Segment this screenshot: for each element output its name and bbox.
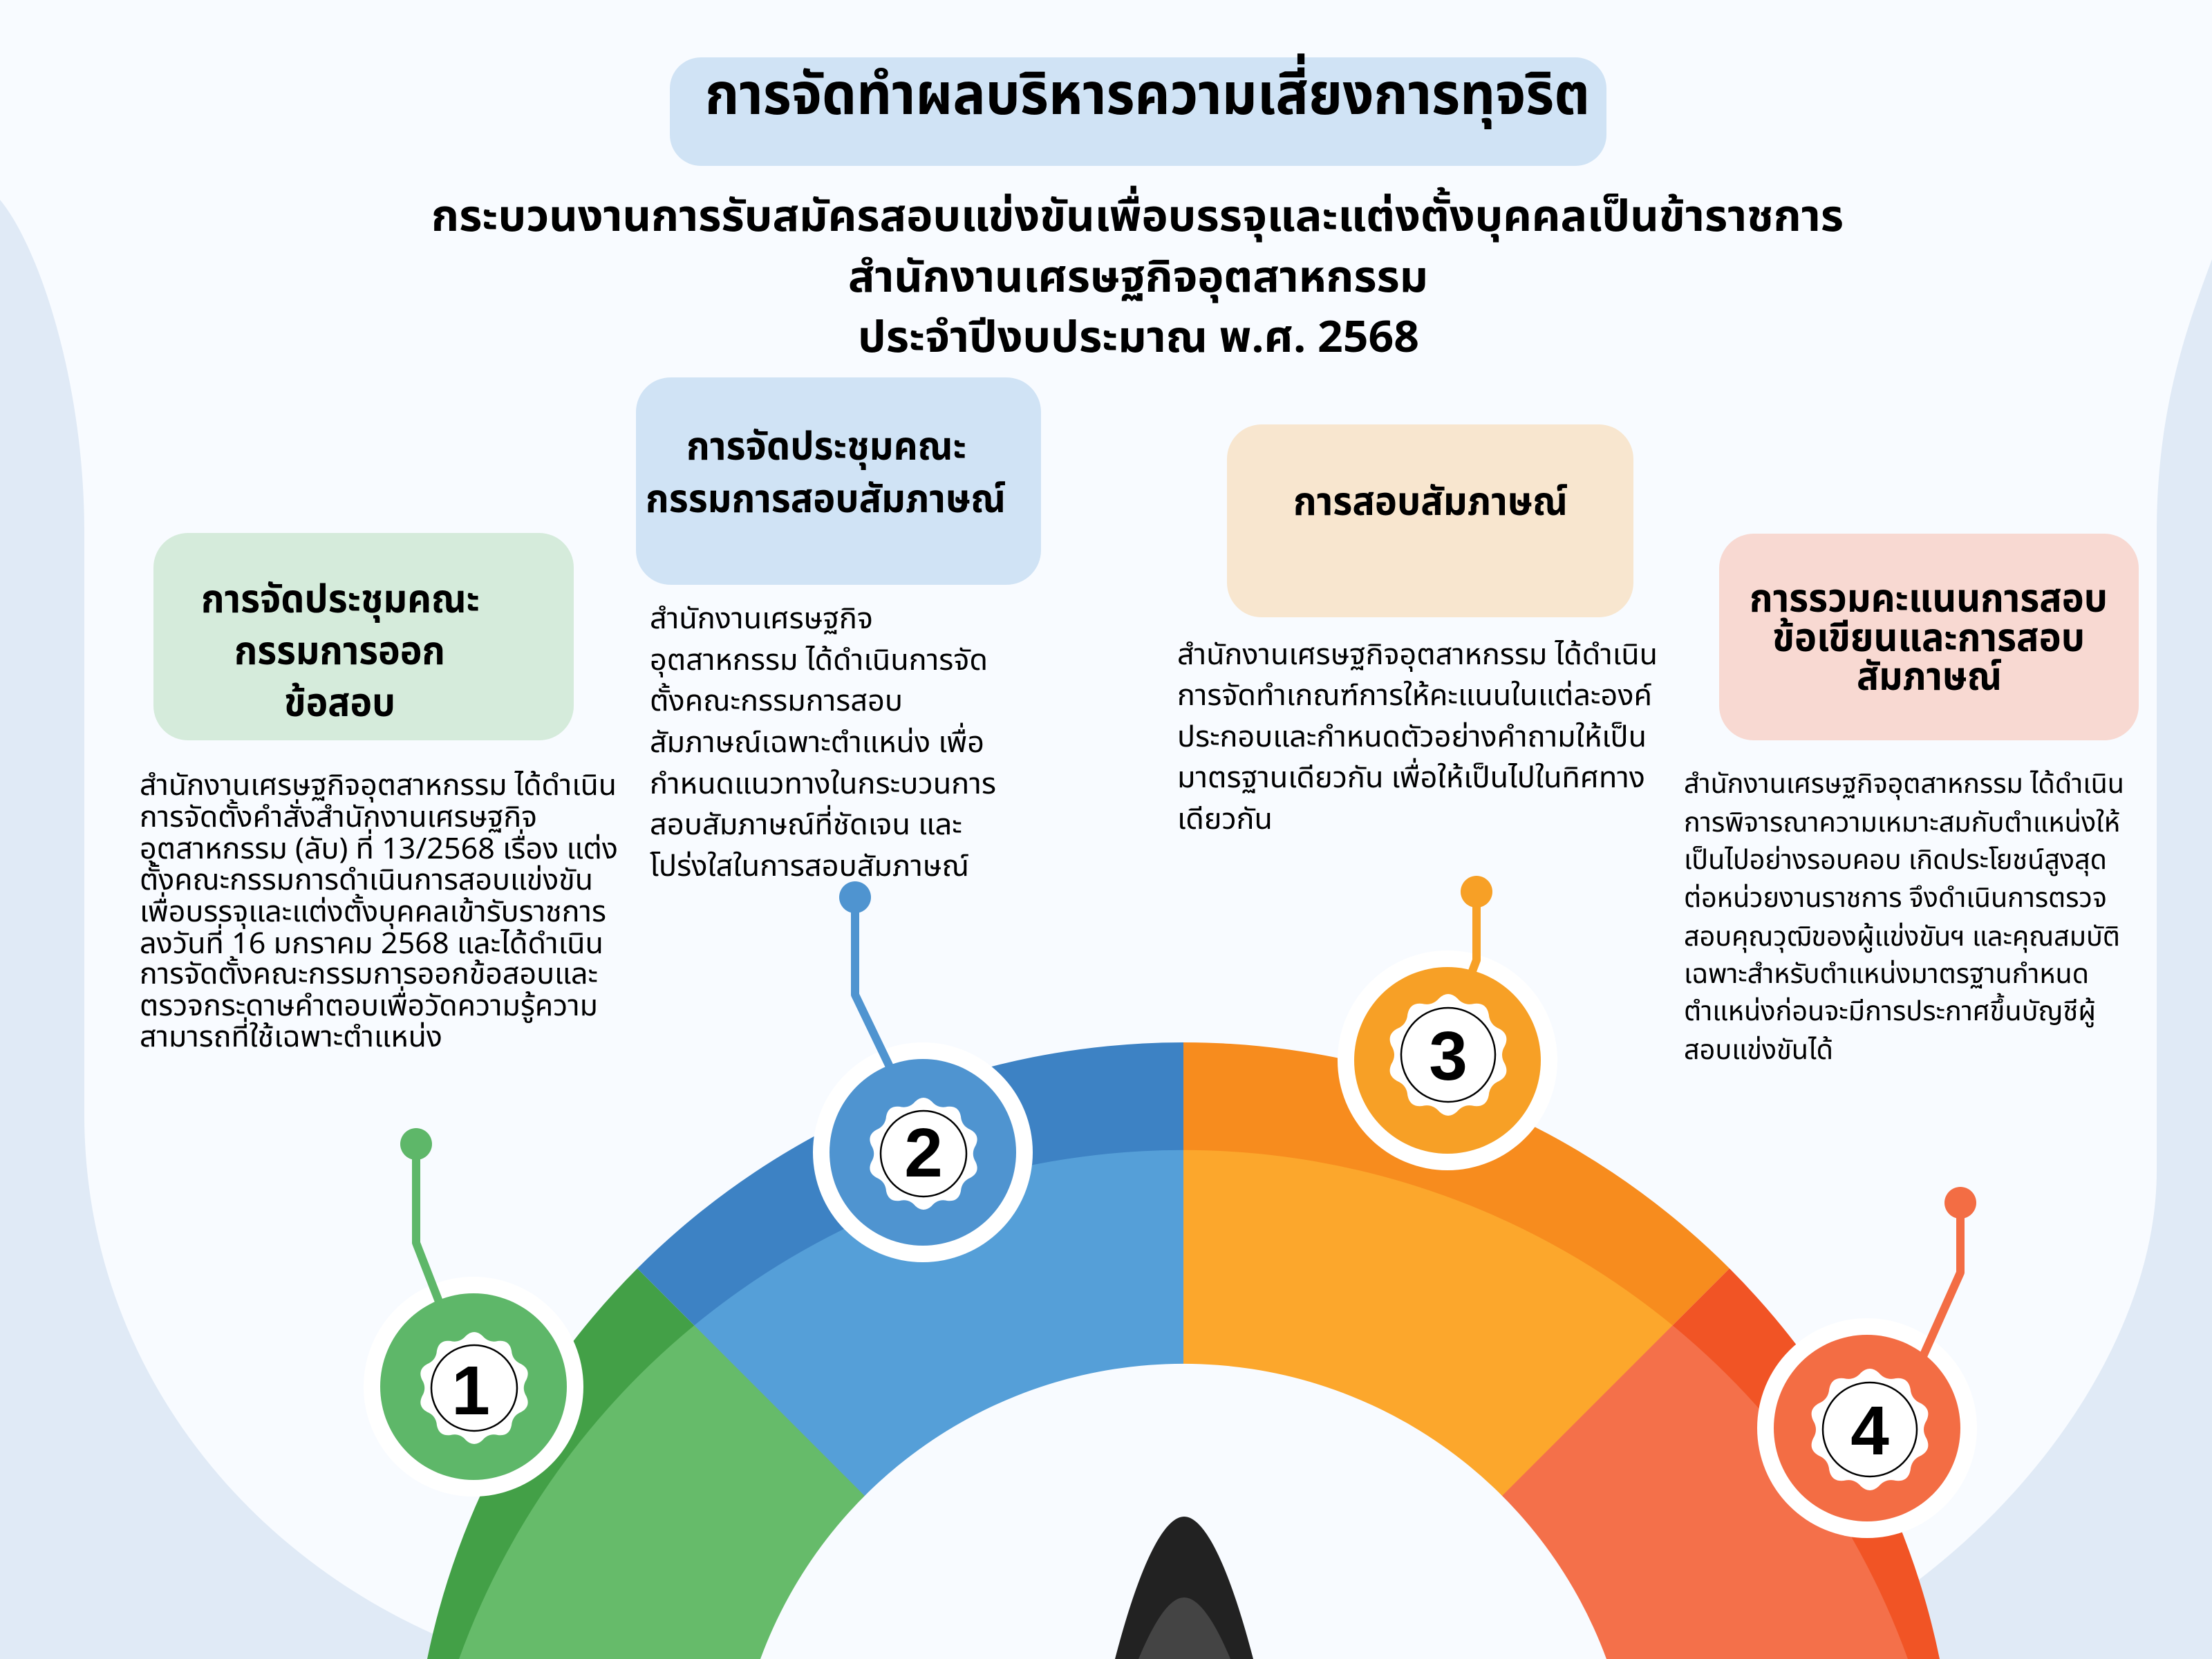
text block: step 1 description [140, 764, 618, 1060]
text block: step 2 description: กำหนดแนวทางในกระบวนการ [650, 762, 996, 807]
panel: step 1 heading [153, 533, 574, 740]
background: left side shape [0, 200, 484, 1659]
title: การจัดทำผลบริหารความเสี่ยงการทุจริต [705, 53, 1590, 140]
text block: step 3 description: มาตรฐานเดียวกัน เพื่อให้เป็นไปในทิศทาง [1177, 756, 1645, 800]
text block: step 1 description: ตรวจกระดาษคำตอบเพื่อวัดความรู้ความ [140, 984, 598, 1029]
text block: step 4 description [1684, 765, 2124, 1071]
text block: step 2 description: อุตสาหกรรม ได้ดำเนินการจัด [650, 639, 988, 683]
badge: step 3 [1338, 876, 1557, 1170]
badge: step 1 [364, 1128, 583, 1497]
subtitle: สำนักงานเศรษฐกิจอุตสาหกรรม [848, 246, 1428, 312]
icon: gauge needle [1115, 1517, 1253, 1659]
text block: step 4 description: สอบแข่งขันได้ [1684, 1031, 1833, 1071]
text block: step 1 description: การจัดตั้งคณะกรรมการออกข้อสอบและ [140, 953, 598, 997]
text block: step 4 description: สำนักงานเศรษฐกิจอุตสาหกรรม ได้ดำเนิน [1684, 765, 2124, 805]
text block: step 1 description: สำนักงานเศรษฐกิจอุตสาหกรรม ได้ดำเนิน [140, 764, 617, 808]
text block: step 2 description: ตั้งคณะกรรมการสอบ [650, 679, 903, 724]
panel: step 1 heading: การจัดประชุมคณะ [201, 571, 480, 630]
badge: step 4: 4 [1850, 1392, 1889, 1470]
subtitle [431, 185, 1844, 372]
badge: step 3: 3 [1429, 1018, 1468, 1095]
text block: step 4 description: เป็นไปอย่างรอบคอบ เกิดประโยชน์สูงสุด [1684, 841, 2107, 881]
panel: step 2 heading [636, 377, 1041, 585]
text block: step 3 description: การจัดทำเกณฑ์การให้คะแนนในแต่ละองค์ [1177, 674, 1652, 718]
text block: step 3 description: สำนักงานเศรษฐกิจอุตสาหกรรม ได้ดำเนิน [1177, 633, 1658, 677]
text block: step 4 description: ตำแหน่งก่อนจะมีการประกาศขึ้นบัญชีผู้ [1684, 992, 2096, 1033]
text block: step 2 description: สอบสัมภาษณ์ที่ชัดเจน และ [650, 803, 962, 847]
panel: step 4 heading [1719, 534, 2139, 740]
panel: step 4 heading: สัมภาษณ์ [1857, 648, 2002, 708]
text block: step 4 description: การพิจารณาความเหมาะสมกับตำแหน่งให้ [1684, 803, 2120, 844]
panel: step 4 heading: ข้อเขียนและการสอบ [1772, 610, 2085, 669]
text block: step 1 description: ตั้งคณะกรรมการดำเนินการสอบแข่งขัน [140, 859, 593, 903]
text block: step 1 description: อุตสาหกรรม (ลับ) ที่ 13/2568 เรื่อง แต่ง [140, 827, 618, 872]
badge: step 2 [813, 881, 1033, 1262]
text block: step 4 description: ต่อหน่วยงานราชการ จึงดำเนินการตรวจ [1684, 879, 2107, 919]
text block: step 3 description [1177, 633, 1658, 842]
text block: step 4 description: เฉพาะสำหรับตำแหน่งมาตรฐานกำหนด [1684, 955, 2089, 995]
text block: step 2 description: สัมภาษณ์เฉพาะตำแหน่ง เพื่อ [650, 721, 984, 765]
panel: step 4 heading: การรวมคะแนนการสอบ [1750, 570, 2108, 630]
subtitle: กระบวนงานการรับสมัครสอบแข่งขันเพื่อบรรจุและแต่งตั้งบุคคลเป็นข้าราชการ [431, 185, 1844, 251]
text block: step 3 description: ประกอบและกำหนดตัวอย่างคำถามให้เป็น [1177, 715, 1647, 760]
subtitle: ประจำปีงบประมาณ พ.ศ. 2568 [858, 306, 1419, 372]
text block: step 1 description: ลงวันที่ 16 มกราคม 2568 และได้ดำเนิน [140, 922, 603, 966]
panel: step 3 heading [1227, 424, 1633, 617]
text block: step 2 description: โปร่งใสในการสอบสัมภาษณ์ [650, 845, 969, 889]
panel: step 1 heading: กรรมการออก [234, 623, 445, 682]
text block: step 1 description: การจัดตั้งคำสั่งสำนักงานเศรษฐกิจ [140, 796, 537, 840]
text block: step 1 description: เพื่อบรรจุและแต่งตั้งบุคคลเข้ารับราชการ [140, 890, 606, 935]
chart: semicircular gauge [427, 1042, 1940, 1659]
panel: step 2 heading: การจัดประชุมคณะ [686, 418, 966, 478]
text block: step 2 description [650, 597, 996, 889]
badge: step 2: 2 [904, 1114, 943, 1192]
panel: step 1 heading: ข้อสอบ [284, 675, 395, 734]
panel: step 3 heading: การสอบสัมภาษณ์ [1293, 474, 1568, 533]
badge: step 1: 1 [451, 1352, 490, 1430]
text block: step 1 description: สามารถที่ใช้เฉพาะตำแหน่ง [140, 1015, 442, 1060]
text block: step 3 description: เดียวกัน [1177, 798, 1273, 842]
text block: step 2 description: สำนักงานเศรษฐกิจ [650, 597, 873, 641]
panel: step 2 heading: กรรมการสอบสัมภาษณ์ [646, 471, 1006, 530]
badge: step 4 [1757, 1187, 1977, 1538]
text block: step 4 description: สอบคุณวุฒิของผู้แข่งขันฯ และคุณสมบัติ [1684, 917, 2120, 958]
background: right side shape [1811, 259, 2212, 1659]
